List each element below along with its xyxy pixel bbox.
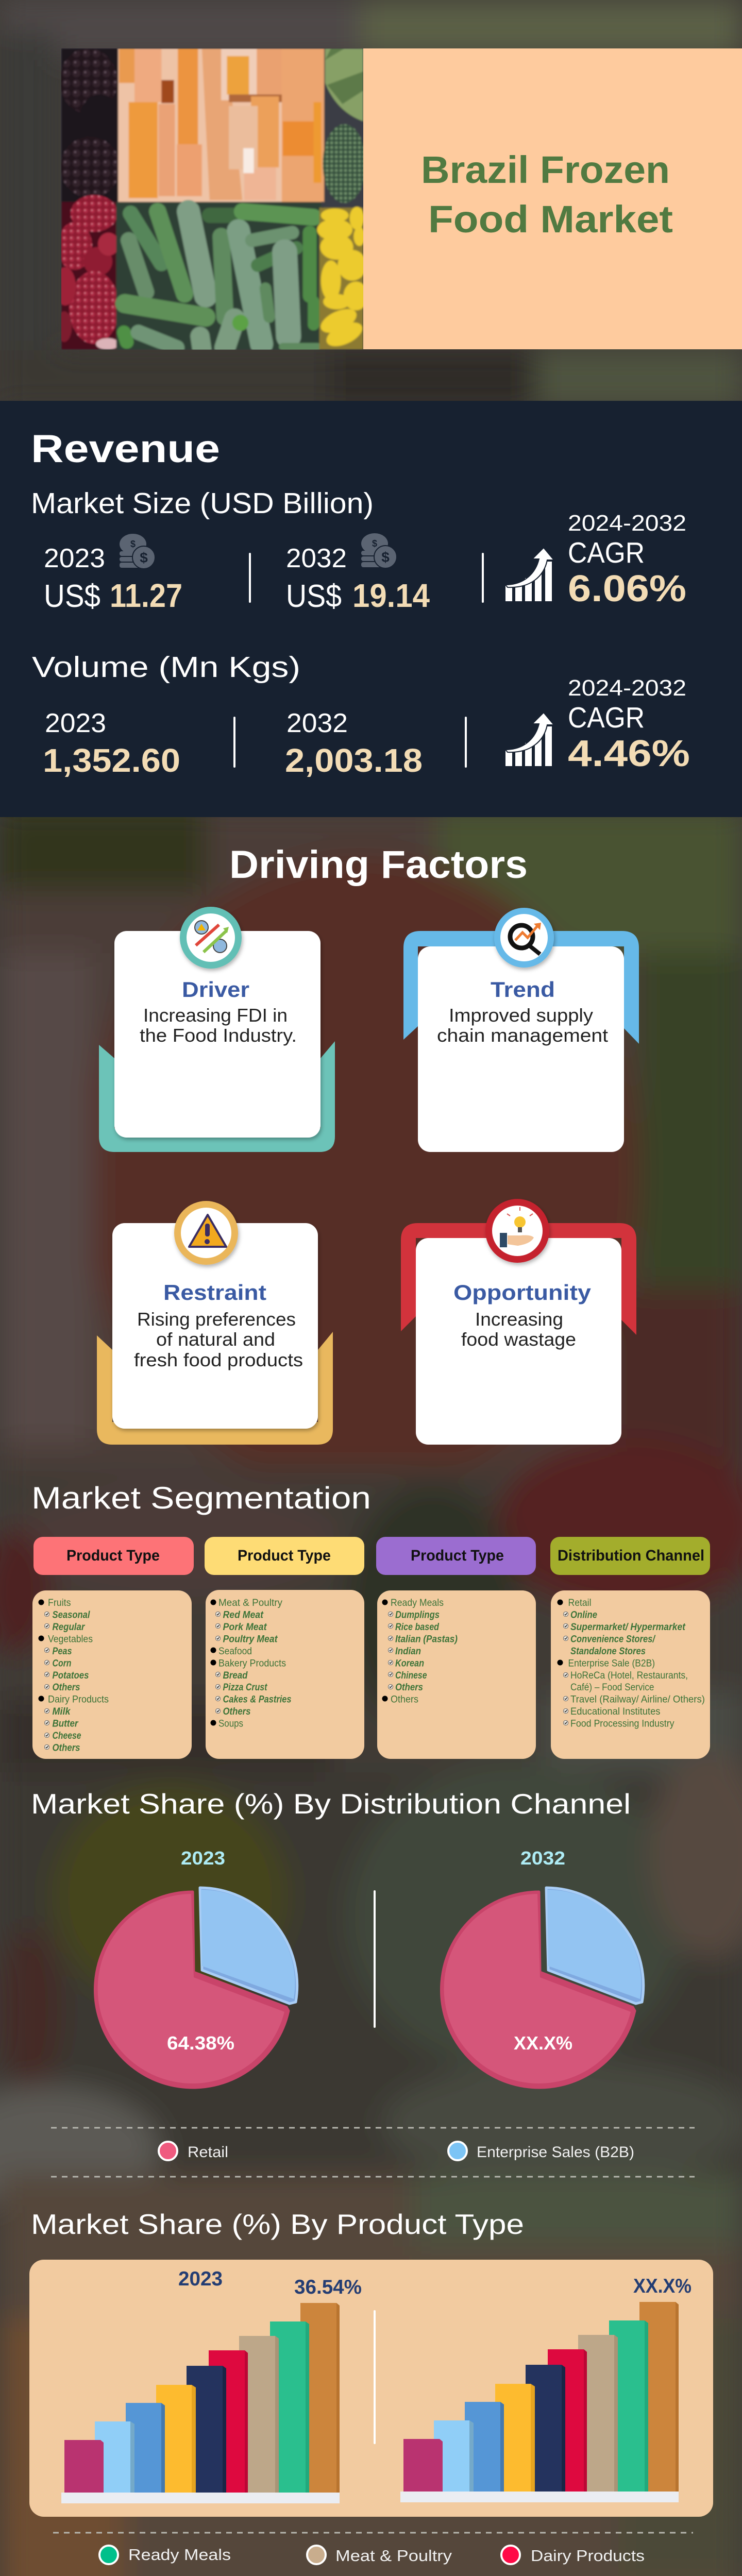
stat: revenue cagr: 2024-2032	[568, 511, 686, 536]
list panel: distribution channel: Food Processing Industry	[570, 1718, 674, 1730]
header: product type 3: Product Type	[411, 1547, 504, 1564]
divider	[374, 2310, 376, 2444]
card: trend	[403, 908, 639, 1152]
list panel: product type 1: Peas	[53, 1646, 72, 1657]
stat: 2023 market size	[44, 544, 182, 614]
heading: market segmentation: Market Segmentation	[31, 1481, 371, 1515]
list panel: distribution channel: Standalone Stores	[570, 1646, 646, 1657]
card: opportunity	[401, 1199, 636, 1445]
icon: restraint	[174, 1201, 238, 1265]
list panel: product type 2: Pizza Crust	[223, 1682, 268, 1693]
value: 36.54%: 36.54%	[294, 2276, 362, 2298]
subheading: volume: Volume (Mn Kgs)	[32, 651, 300, 684]
list panel: distribution channel: Café) – Food Service	[570, 1682, 654, 1693]
label: driver: Driver	[182, 977, 249, 1002]
list panel: product type 3: Ready Meals	[391, 1597, 444, 1608]
list panel: product type 2: Seafood	[218, 1646, 252, 1657]
text: opportunity	[461, 1309, 576, 1350]
text: restraint: Rising preferences	[137, 1309, 296, 1330]
stat: 2023 volume: 2023	[45, 708, 106, 738]
list panel: product type 2: Cakes & Pastries	[223, 1694, 292, 1705]
icon: coins 2023: $	[130, 539, 136, 549]
stat: volume cagr: 4.46%	[568, 733, 690, 774]
stat: 2032 market size: US$	[286, 579, 342, 614]
header: product type 2: Product Type	[238, 1547, 331, 1564]
icon: coins 2032	[361, 533, 397, 568]
label: trend: Trend	[491, 977, 555, 1002]
list panel: product type 3: Rice based	[395, 1621, 440, 1633]
header: product type 3	[376, 1537, 536, 1575]
subheading: market size: Market Size (USD Billion)	[31, 487, 374, 520]
label: 2023: 2023	[181, 1848, 225, 1869]
divider	[249, 553, 251, 603]
stat: 2032 volume	[285, 708, 423, 779]
list panel: product type 3: Italian (Pastas)	[395, 1633, 458, 1645]
text: restraint: fresh food products	[134, 1349, 303, 1370]
header band	[55, 48, 742, 351]
label: opportunity: Opportunity	[453, 1280, 592, 1304]
icon: trend	[494, 908, 554, 968]
divider	[233, 717, 235, 768]
legend: distribution channel	[51, 2128, 695, 2177]
list panel: product type 3: Korean	[395, 1657, 424, 1669]
hero photo: frozen vegetables and berries	[55, 48, 368, 351]
stat: volume cagr	[568, 675, 690, 774]
text: driver	[140, 1005, 297, 1046]
list panel: distribution channel: Online	[570, 1609, 597, 1621]
text: restraint	[134, 1309, 303, 1370]
stat: volume cagr: 2024-2032	[568, 675, 686, 701]
legend item: enterprise sales: Enterprise Sales (B2B)	[477, 2144, 634, 2161]
legend item: retail	[159, 2142, 228, 2161]
label: 2032: 2032	[520, 1848, 565, 1869]
label: 2023: 2023	[178, 2268, 223, 2290]
bar chart: 2032	[400, 2302, 679, 2502]
header: product type 1	[33, 1537, 194, 1575]
list panel: product type 1: Corn	[53, 1657, 72, 1669]
list panel: product type 1: Potatoes	[53, 1670, 89, 1681]
list panel: distribution channel: HoReCa (Hotel, Restaurants,	[570, 1670, 688, 1681]
list panel: product type 3: Indian	[395, 1646, 421, 1657]
list panel: distribution channel: Supermarket/ Hypermarket	[570, 1621, 686, 1633]
bar chart: 2023	[61, 2303, 340, 2503]
title	[421, 148, 673, 241]
list panel: product type 3: Others	[391, 1694, 418, 1705]
list panel: product type 2: Red Meat	[223, 1609, 264, 1621]
divider	[465, 717, 467, 768]
text: trend: Improved supply	[449, 1005, 593, 1026]
list panel: distribution channel: Travel (Railway/ Airline/ Others)	[570, 1694, 705, 1705]
list panel: product type 1	[32, 1590, 192, 1759]
icon: growth chart	[505, 548, 554, 601]
list panel: product type 1: Butter	[53, 1718, 79, 1730]
list panel: product type 1: Cheese	[53, 1730, 81, 1741]
legend: product type: Ready Meals	[128, 2546, 231, 2564]
list panel: product type 2: Soups	[218, 1718, 243, 1730]
heading: revenue: Revenue	[31, 427, 220, 471]
text: opportunity: food wastage	[461, 1329, 576, 1350]
heading: market share by product type: Market Share (%) By Product Type	[31, 2208, 524, 2240]
title: Food Market	[428, 198, 673, 241]
stat: 2032 volume: 2032	[286, 708, 348, 738]
value: XX.X%: XX.X%	[514, 2032, 572, 2054]
panel: bar charts	[29, 2260, 713, 2517]
panel: revenue	[0, 401, 742, 817]
heading: driving factors: Driving Factors	[229, 843, 528, 887]
stat: revenue cagr: 6.06%	[568, 568, 686, 609]
value: XX.X%: XX.X%	[633, 2275, 692, 2297]
list panel: product type 1: Dairy Products	[48, 1694, 109, 1705]
stat: 2032 market size: 19.14	[352, 577, 430, 614]
list panel: product type 1: Milk	[53, 1706, 71, 1717]
peach title panel	[363, 48, 742, 349]
header: distribution channel	[550, 1537, 710, 1575]
list panel: distribution channel: Educational Institutes	[570, 1706, 661, 1717]
list panel: distribution channel: Retail	[568, 1597, 592, 1608]
icon: coins 2032: $	[381, 549, 390, 565]
list panel: product type 2: Others	[223, 1706, 251, 1717]
list panel: product type 2: Poultry Meat	[223, 1633, 278, 1645]
stat: 2023 market size: 11.27	[110, 577, 182, 614]
stat: 2032 market size	[286, 544, 430, 614]
header: product type 1: Product Type	[66, 1547, 160, 1564]
text: opportunity: Increasing	[475, 1309, 563, 1330]
legend: product type: Dairy Products	[531, 2547, 645, 2565]
stat: revenue cagr	[568, 511, 686, 609]
icon: driver	[180, 907, 242, 969]
list panel: product type 3	[377, 1590, 536, 1759]
list panel: product type 1: Vegetables	[48, 1633, 93, 1645]
card: restraint	[97, 1201, 333, 1445]
pie chart: 2032	[441, 1888, 644, 2088]
stat: 2032 market size: 2032	[286, 544, 347, 573]
pie chart: 2023	[95, 1888, 297, 2088]
value: 64.38%: 64.38%	[167, 2032, 234, 2054]
list panel: distribution channel	[551, 1590, 710, 1759]
text: restraint: of natural and	[156, 1329, 275, 1350]
card: driver	[99, 907, 335, 1152]
icon: coins 2023: $	[140, 550, 148, 566]
legend item: retail: Retail	[188, 2144, 228, 2161]
icon: opportunity	[485, 1199, 549, 1263]
stat: 2023 volume	[43, 708, 180, 779]
legend: product type	[53, 2533, 697, 2576]
heading: market share by distribution channel: Market Share (%) By Distribution Channel	[31, 1788, 631, 1820]
icon: coins 2023	[120, 534, 155, 569]
divider	[374, 1890, 376, 2028]
text: trend: chain management	[437, 1025, 608, 1046]
list panel: product type 2: Meat & Poultry	[218, 1597, 282, 1608]
label: restraint: Restraint	[163, 1280, 266, 1304]
list panel: product type 2: Bread	[223, 1670, 248, 1681]
list panel: product type 3: Dumplings	[395, 1609, 440, 1621]
stat: volume cagr: CAGR	[568, 701, 645, 734]
stat: revenue cagr: CAGR	[568, 536, 645, 569]
list panel: product type 1: Others	[53, 1742, 80, 1754]
legend: product type: Meat & Poultry	[335, 2547, 452, 2565]
stat: 2023 market size: 2023	[44, 544, 105, 573]
header: distribution channel: Distribution Channel	[558, 1547, 704, 1564]
list panel: distribution channel: Convenience Stores/	[570, 1633, 656, 1645]
text: driver: the Food Industry.	[140, 1025, 297, 1046]
list panel: product type 3: Others	[395, 1682, 423, 1693]
stat: 2023 volume: 1,352.60	[43, 742, 180, 779]
stat: 2023 market size: US$	[44, 579, 100, 614]
icon: coins 2032: $	[372, 538, 377, 549]
list panel: distribution channel: Enterprise Sale (B2B)	[568, 1657, 655, 1669]
header: product type 2	[205, 1537, 364, 1575]
list panel: product type 1: Fruits	[48, 1597, 71, 1608]
divider	[482, 553, 484, 603]
text: driver: Increasing FDI in	[143, 1005, 288, 1026]
text: trend	[437, 1005, 608, 1046]
stat: 2032 volume: 2,003.18	[285, 742, 423, 779]
list panel: product type 1: Others	[53, 1682, 80, 1693]
list panel: product type 2	[206, 1590, 364, 1759]
list panel: product type 3: Chinese	[395, 1670, 427, 1681]
list panel: product type 1: Regular	[53, 1621, 86, 1633]
list panel: product type 2: Pork Meat	[223, 1621, 267, 1633]
list panel: product type 2: Bakery Products	[218, 1657, 286, 1669]
title: Brazil Frozen	[421, 148, 670, 191]
list panel: product type 1: Seasonal	[53, 1609, 90, 1621]
icon: growth chart	[505, 713, 554, 766]
